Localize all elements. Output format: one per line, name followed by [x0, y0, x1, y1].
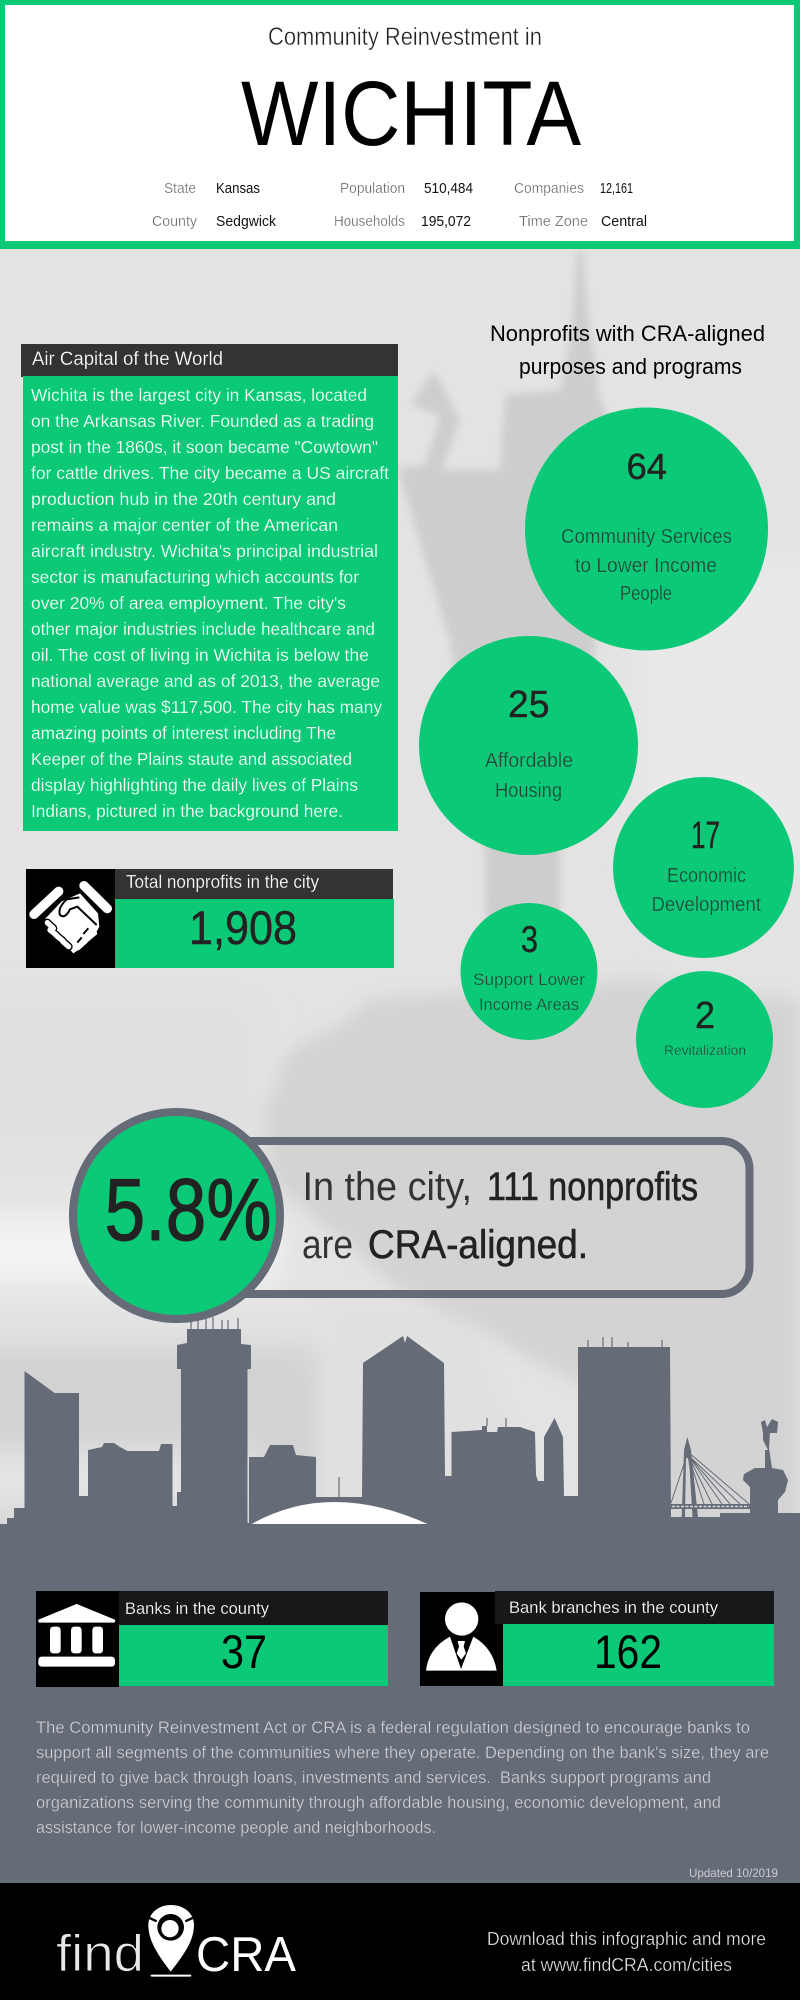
download note: at www.findCRA.com/cities	[521, 1955, 732, 1975]
skyline antennas	[191, 1316, 662, 1497]
stat: total nonprofits in the city	[26, 869, 394, 968]
city facts	[152, 180, 647, 230]
stat: banks in the county: 37	[221, 1625, 267, 1678]
city description: on the Arkansas River. Founded as a trading	[31, 411, 374, 431]
bubble: economic development	[613, 777, 794, 958]
stat: bank branches in the county: 162	[594, 1625, 662, 1678]
city facts: Population	[340, 180, 405, 197]
bubble: economic development: 17	[691, 815, 720, 857]
city description: for cattle drives. The city became a US aircraft	[31, 463, 389, 483]
bubble: community services: to Lower Income	[575, 555, 717, 577]
stat: bank branches in the county: Bank branches in the county	[509, 1598, 718, 1617]
city description: sector is manufacturing which accounts for	[31, 567, 359, 587]
callout frame	[200, 1141, 750, 1294]
city description: home value was $117,500. The city has many	[31, 697, 382, 717]
callout text: In the city,	[302, 1165, 472, 1209]
bubble: affordable housing	[419, 636, 638, 855]
logo: findCRA: CRA	[196, 1928, 296, 1982]
title line: Community Reinvestment in	[268, 23, 542, 51]
bubble: economic development: Economic	[667, 865, 746, 887]
text block: about the CRA: The Community Reinvestment Act or CRA is a federal regulation designed to encourage banks to	[36, 1719, 750, 1737]
city description: aircraft industry. Wichita's principal industrial	[31, 541, 378, 561]
bubble: support lower income areas: Support Lower	[473, 970, 585, 989]
bridge	[671, 1437, 750, 1517]
city facts: Time Zone	[519, 213, 588, 230]
bubble: revitalization	[636, 971, 773, 1108]
download note	[487, 1929, 766, 1975]
text block: about the CRA: organizations serving the community through affordable housing, economic development, and	[36, 1794, 721, 1812]
icon: handshake	[34, 886, 107, 953]
city description: oil. The cost of living in Wichita is below the	[31, 645, 369, 665]
city facts: 12,161	[600, 180, 633, 197]
callout: share of CRA-aligned nonprofits	[73, 1112, 750, 1319]
bubble: support lower income areas	[460, 903, 598, 1040]
city facts: 510,484	[424, 180, 473, 197]
bubble: community services: 64	[626, 446, 667, 487]
city description: amazing points of interest including The	[31, 723, 336, 743]
stat: total nonprofits in the city: 1,908	[189, 901, 297, 954]
bubble: affordable housing: Housing	[495, 779, 562, 802]
text block: about the CRA: required to give back through loans, investments and services. Banks support programs and	[36, 1769, 711, 1787]
panel heading	[21, 344, 398, 377]
callout text: are	[302, 1223, 353, 1267]
bubble: revitalization: Revitalization	[664, 1042, 746, 1058]
logo: findCRA	[56, 1905, 296, 1983]
heading: nonprofits with CRA-aligned purposes: purposes and programs	[519, 354, 742, 379]
dome	[252, 1502, 428, 1524]
background photo: Keeper of the Plains statue	[0, 249, 800, 1549]
city description: Wichita is the largest city in Kansas, located	[31, 385, 367, 405]
text block: about the CRA: assistance for lower-income people and neighborhoods.	[36, 1819, 436, 1837]
stat: bank branches in the county	[420, 1591, 774, 1686]
city facts: Sedgwick	[216, 213, 276, 230]
city description: production hub in the 20th century and	[31, 489, 336, 509]
footer band	[0, 1883, 800, 2000]
text block: about the CRA	[36, 1719, 769, 1837]
bubble: affordable housing: 25	[508, 684, 550, 726]
text block: about the CRA: support all segments of the communities where they operate. Depending on the bank's size, they are	[36, 1744, 769, 1762]
city description: other major industries include healthcare and	[31, 619, 375, 639]
percentage circle	[73, 1112, 280, 1319]
logo: findCRA: find	[56, 1925, 144, 1983]
city facts: Companies	[514, 180, 584, 197]
icon: bank	[38, 1604, 115, 1667]
download note: Download this infographic and more	[487, 1929, 766, 1949]
city description	[23, 376, 398, 831]
city facts: Households	[334, 213, 405, 230]
update date: Updated 10/2019	[689, 1866, 778, 1880]
stat: banks in the county	[36, 1591, 388, 1687]
Wichita skyline silhouette and lower band	[0, 1316, 800, 1883]
icon: location pin	[148, 1905, 194, 1977]
city facts: Kansas	[216, 180, 260, 197]
panel heading: Air Capital of the World	[32, 349, 223, 370]
bubble: community services: Community Services	[561, 526, 732, 548]
city description: Indians, pictured in the background here.	[31, 801, 343, 821]
city description: national average and as of 2013, the average	[31, 671, 380, 691]
city description: over 20% of area employment. The city's	[31, 593, 346, 613]
heading: nonprofits with CRA-aligned purposes	[490, 321, 765, 379]
bubble: revitalization: 2	[695, 995, 715, 1037]
city description: Keeper of the Plains staute and associated	[31, 749, 352, 769]
city facts: 195,072	[421, 213, 471, 230]
heading: nonprofits with CRA-aligned purposes: Nonprofits with CRA-aligned	[490, 321, 765, 346]
percentage circle: 5.8%	[104, 1160, 272, 1259]
header panel	[0, 0, 800, 249]
city facts: State	[164, 180, 196, 197]
city name: WICHITA	[241, 63, 582, 165]
callout text	[302, 1165, 698, 1267]
bubble: affordable housing: Affordable	[485, 749, 573, 772]
callout text: 111 nonprofits	[487, 1165, 698, 1209]
icon: banker	[426, 1602, 497, 1671]
callout text: CRA-aligned.	[368, 1223, 588, 1267]
bubble: support lower income areas: Income Areas	[479, 995, 579, 1014]
stat: banks in the county: Banks in the county	[125, 1599, 269, 1618]
panel: Air Capital of the World	[21, 344, 398, 831]
bubble: community services	[525, 408, 768, 650]
city facts: Central	[601, 213, 647, 230]
city description: post in the 1860s, it soon became "Cowtown"	[31, 437, 378, 457]
bubble: support lower income areas: 3	[521, 919, 538, 960]
stat: total nonprofits in the city: Total nonprofits in the city	[126, 872, 319, 892]
bubble: economic development: Development	[652, 894, 761, 916]
city description: remains a major center of the American	[31, 515, 338, 535]
city description: display highlighting the daily lives of Plains	[31, 775, 358, 795]
city facts: County	[152, 213, 197, 230]
bubble: community services: People	[620, 583, 672, 605]
